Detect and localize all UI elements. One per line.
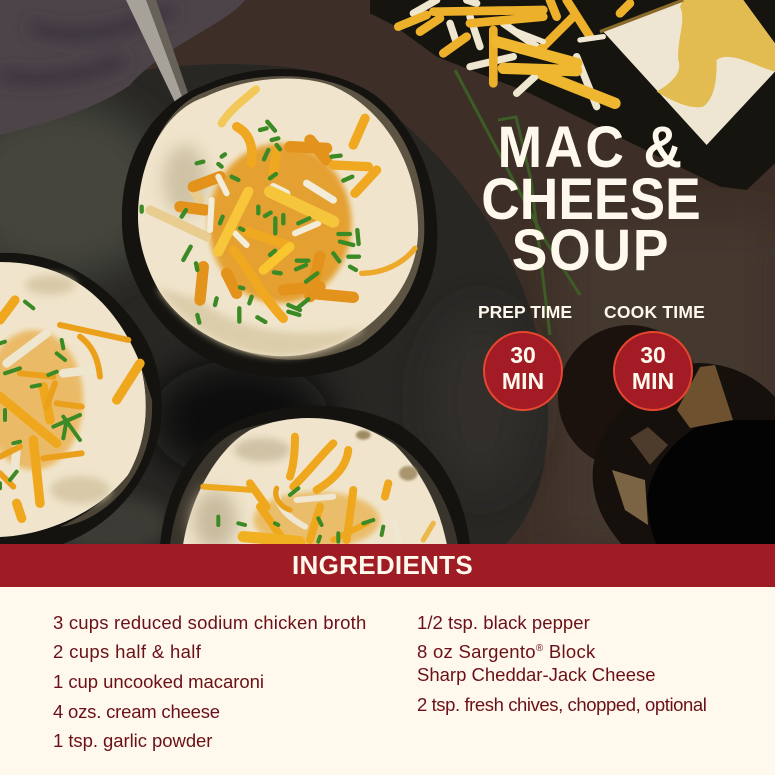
title [481,115,701,283]
napkin [0,0,245,135]
left ingredient column [53,612,366,751]
title: MAC & [498,115,684,180]
prep time badge: MIN [502,368,544,394]
top bowl [122,69,437,377]
left ingredient column: 3 cups reduced sodium chicken broth [53,612,366,633]
ingredients banner: INGREDIENTS [292,550,473,580]
wine glass [558,325,775,545]
cheese block [603,0,775,145]
left ingredient column: 1 tsp. garlic powder [53,730,212,751]
food photo background [0,0,775,544]
spoon [126,0,205,148]
left ingredient column: 2 cups half & half [53,641,201,662]
ingredients panel [0,587,775,775]
cook time label: COOK TIME [604,302,705,322]
right ingredient column: 2 tsp. fresh chives, chopped, optional [417,694,706,715]
prep time label: PREP TIME [478,302,572,322]
title: CHEESE [481,167,701,232]
title: SOUP [512,218,670,283]
left bowl [0,253,162,545]
cook time badge [613,331,693,411]
prep time badge: 30 [510,342,536,368]
right ingredient column: 8 oz Sargento® Block [417,641,596,662]
ingredients banner [0,544,775,587]
slate board [0,64,548,555]
left ingredient column: 1 cup uncooked macaroni [53,671,264,692]
cook time badge: 30 [640,342,666,368]
bottom bowl [160,406,470,550]
cutting board with cheese [370,0,775,190]
chives [455,70,580,335]
left ingredient column: 4 ozs. cream cheese [53,701,220,722]
right ingredient column [417,612,706,715]
right ingredient column: Sharp Cheddar-Jack Cheese [417,664,656,685]
right ingredient column: 1/2 tsp. black pepper [417,612,590,633]
cook time badge: MIN [632,368,674,394]
prep time badge [483,331,563,411]
